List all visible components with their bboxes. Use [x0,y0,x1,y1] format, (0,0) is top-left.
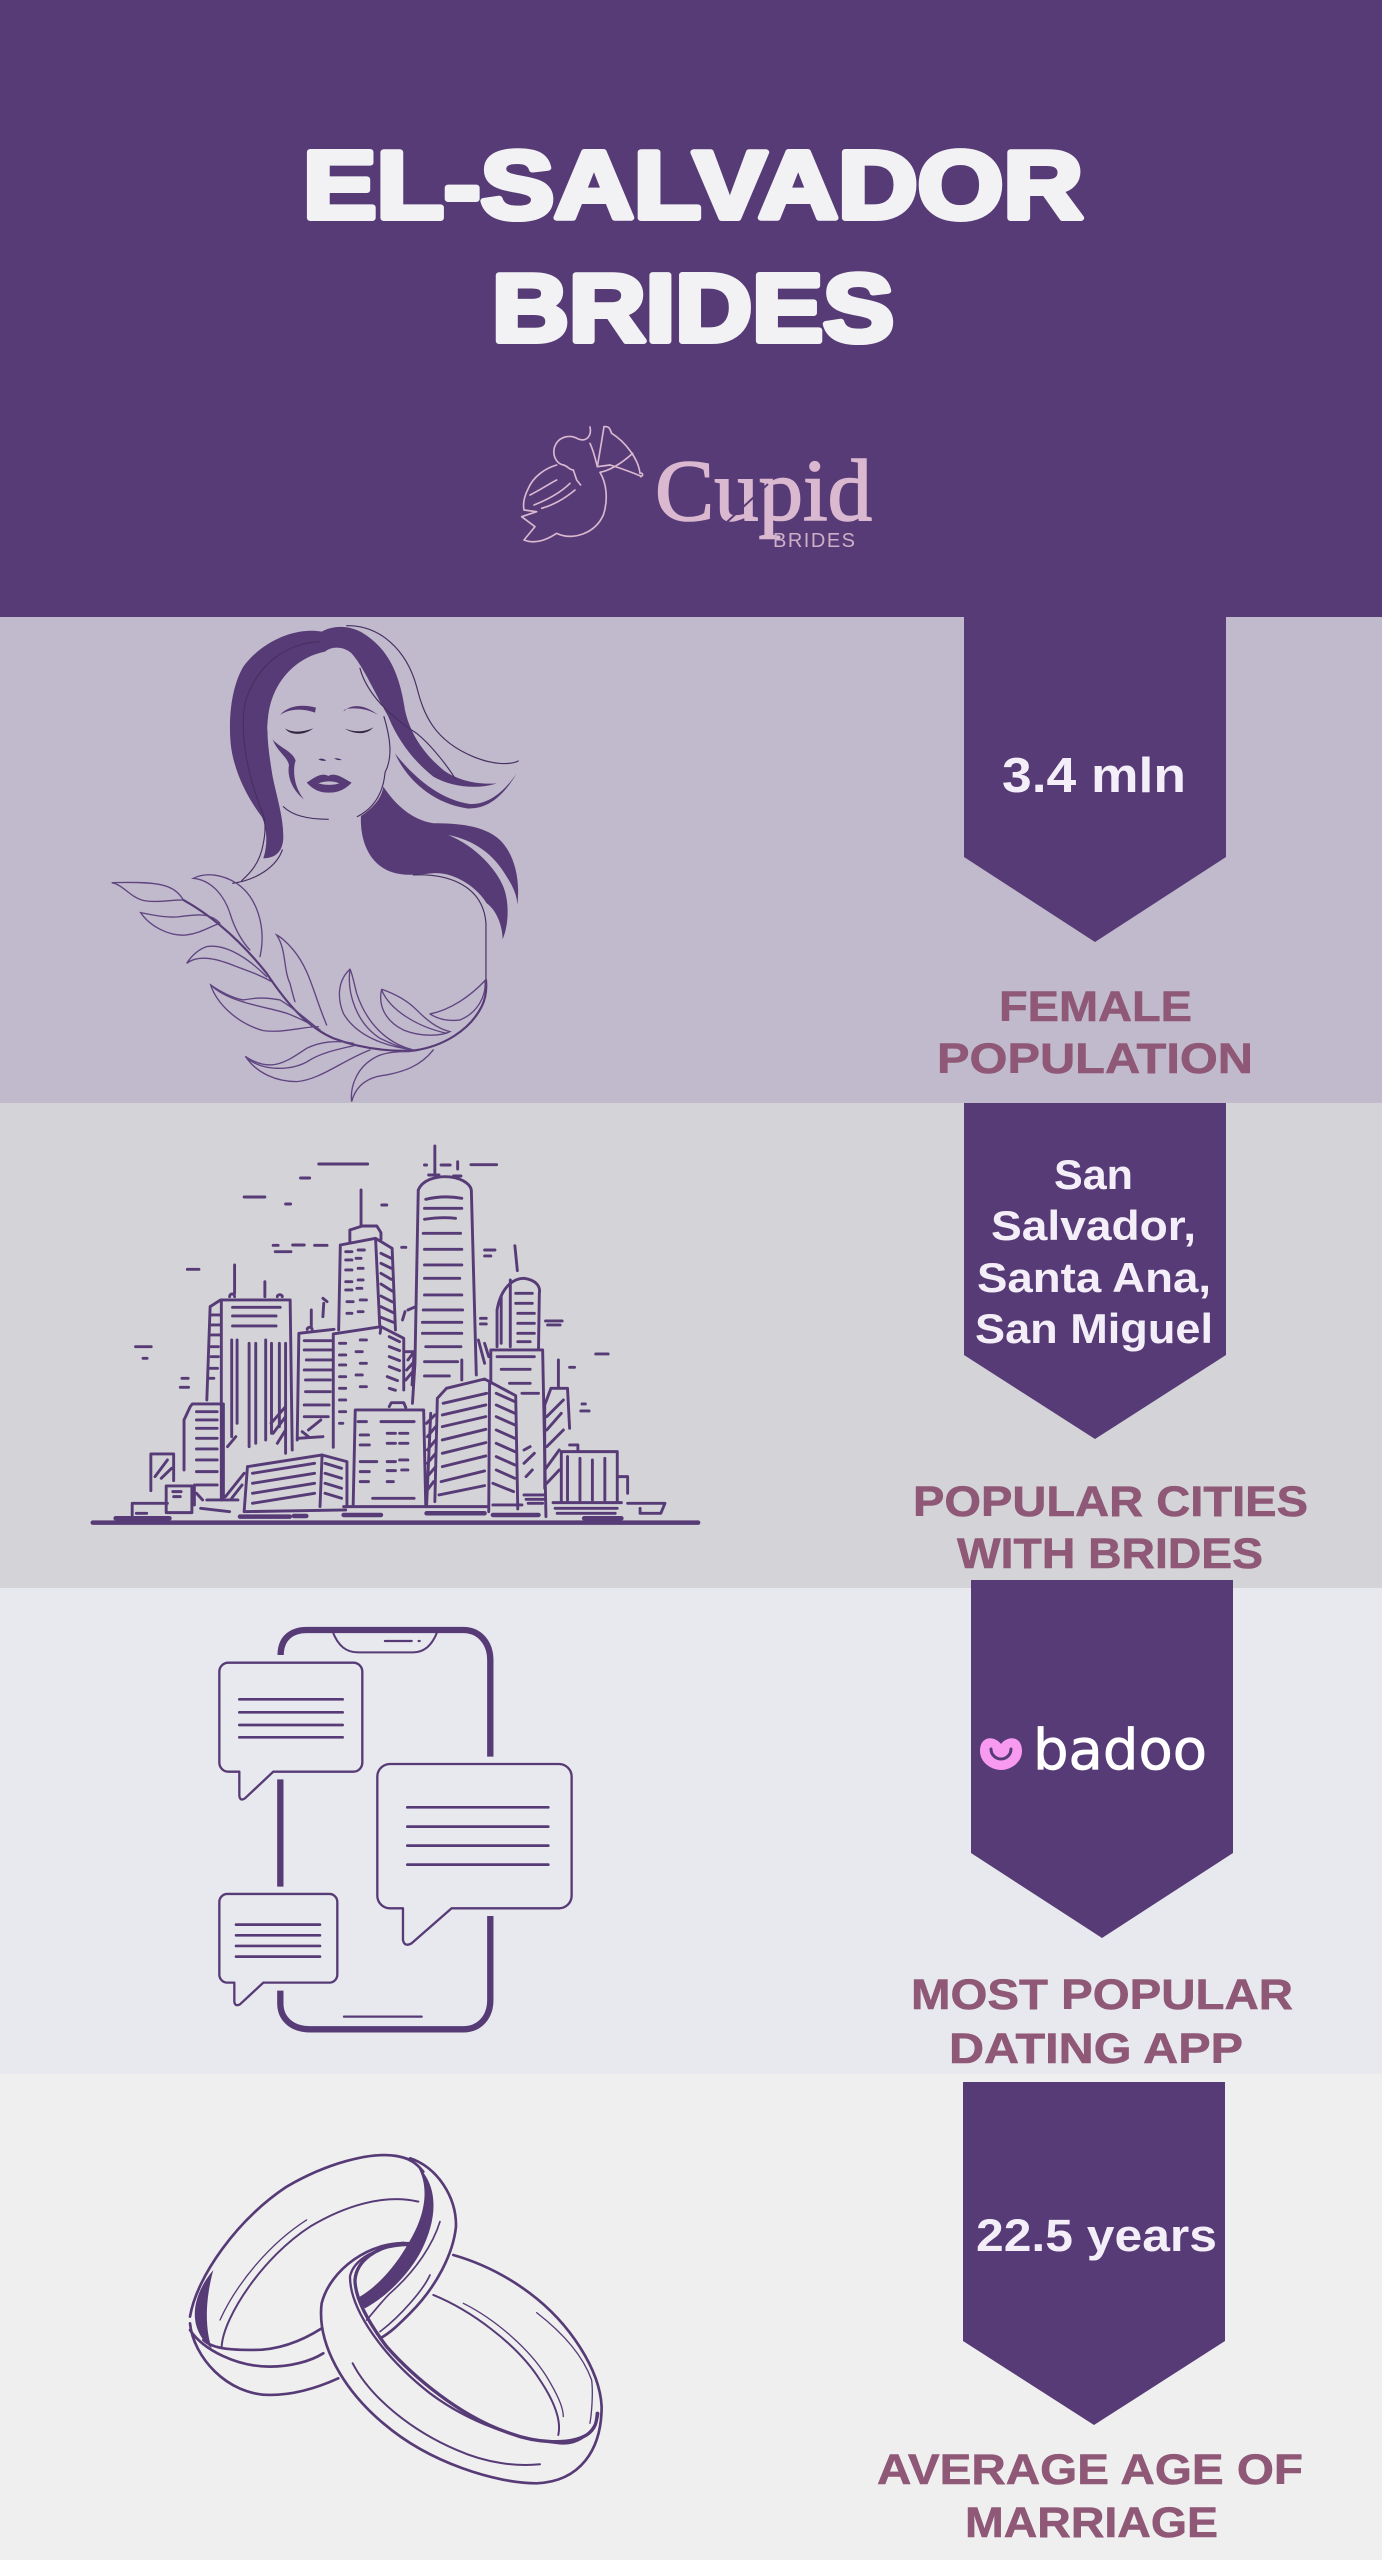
ground [93,1520,698,1525]
banner: 22.5 years [963,2082,1225,2425]
leaves [112,875,486,1102]
icon: badoo heart [980,1738,1022,1770]
tower 1 [412,1175,476,1403]
banner: badoo [971,1580,1233,1938]
label: dating app [911,1971,1293,2073]
building strip left of mid [297,1298,414,1440]
label: average age of marriage: MARRIAGE [965,2499,1218,2547]
banner: 22.5 years: 22.5 years [976,2210,1217,2261]
banner: cities [964,1103,1226,1439]
label: popular cities [913,1478,1308,1578]
building mid [333,1327,414,1447]
banner: cities: Santa Ana, [977,1254,1211,1301]
label: dating app: DATING APP [949,2025,1243,2073]
panel: popular cities [0,1103,1382,1588]
illustration: woman with leaves [112,626,518,1102]
rounded tower right [462,1278,546,1517]
logo: Cupid Brides [522,427,872,552]
illustration: city skyline [93,1146,698,1523]
banner: 3.4 mln [964,617,1226,942]
banner: cities: San [1054,1151,1133,1198]
logo: Cupid Brides: Cupid [655,443,872,540]
banner: badoo: badoo [1033,1718,1207,1783]
label: average age of marriage [877,2446,1303,2547]
front building right [435,1379,518,1512]
illustration: wedding rings [190,2155,602,2483]
low building [244,1455,347,1512]
banner: 3.4 mln: 3.4 mln [1002,749,1186,803]
label: female population: POPULATION [937,1035,1253,1083]
illustration: phone with chat bubbles [219,1630,572,2029]
building left stripe [207,1265,292,1500]
icon: cupid outline [522,427,643,542]
banner: cities: San Miguel [975,1305,1213,1352]
label: dating app: MOST POPULAR [911,1971,1293,2019]
tower 2 [339,1190,395,1330]
panel: header [0,0,1382,617]
title [303,132,1083,362]
banner: cities: Salvador, [991,1202,1196,1249]
face [280,706,378,793]
label: female population [937,983,1253,1083]
panel: dating app [0,1580,1382,2074]
panel: age of marriage [0,2074,1382,2560]
center building [353,1403,436,1507]
panel: female population [0,617,1382,1103]
label: female population: FEMALE [999,983,1192,1031]
title: BRIDES [492,255,894,362]
small left building [184,1404,244,1499]
title: EL-SALVADOR [303,132,1083,239]
label: popular cities: WITH BRIDES [957,1530,1263,1578]
right low building [553,1445,665,1513]
label: popular cities: POPULAR CITIES [913,1478,1308,1526]
label: average age of marriage: AVERAGE AGE OF [877,2446,1303,2494]
logo: Cupid Brides: BRIDES [773,530,855,552]
